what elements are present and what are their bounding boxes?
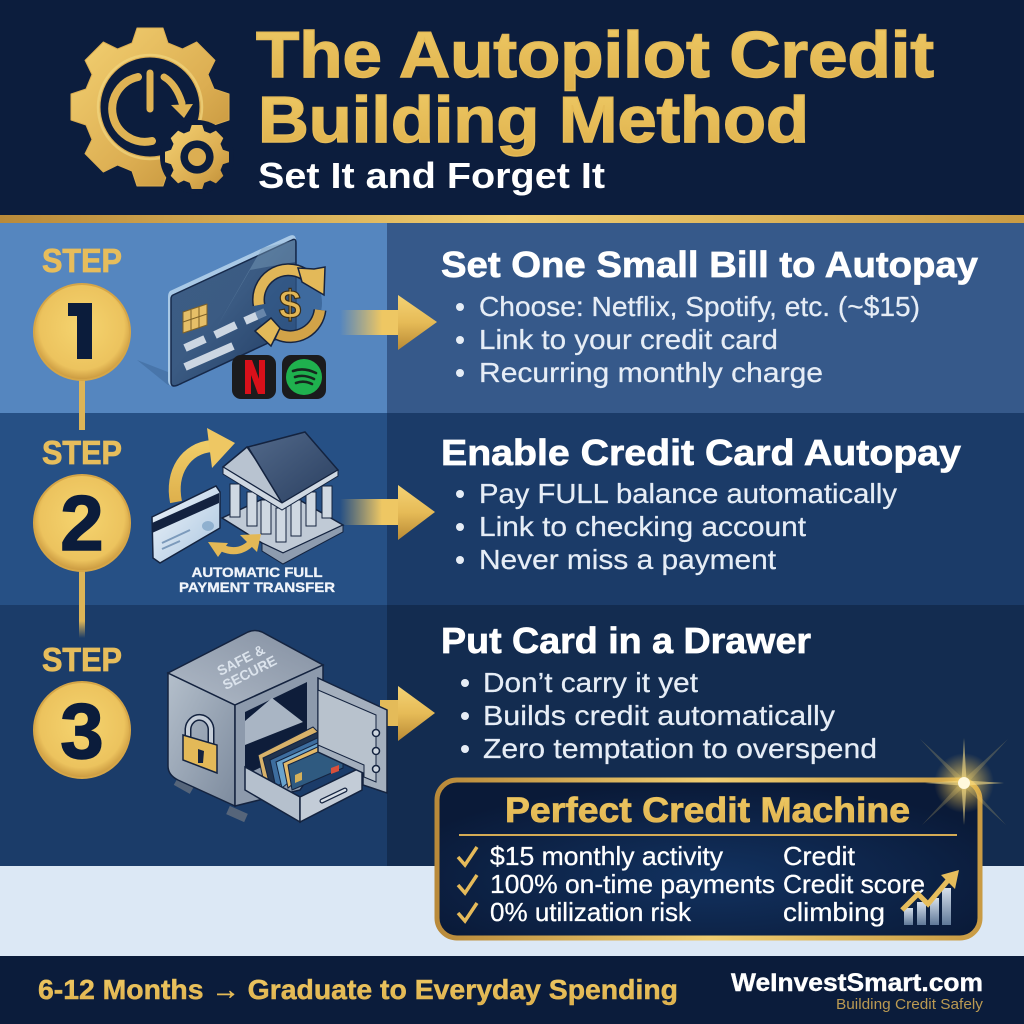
icon: autopilot gear bbox=[71, 28, 234, 194]
checklist: 0% utilization risk bbox=[490, 897, 692, 927]
credit score note bbox=[783, 841, 925, 927]
safe left face bbox=[168, 673, 235, 806]
icon: spotify bbox=[282, 355, 326, 399]
safe top label: SAFE & bbox=[214, 641, 267, 679]
step 3 text: Put Card in a Drawer bbox=[441, 620, 811, 661]
light background band bbox=[0, 866, 1024, 956]
icon: credit card with autopay arrows bbox=[137, 235, 296, 386]
title: The Autopilot Credit bbox=[256, 18, 934, 91]
step 3 text: Builds credit automatically bbox=[483, 700, 835, 731]
arrow: step 2 bbox=[340, 485, 435, 540]
drawer bbox=[245, 767, 362, 822]
step 2 badge: 2 bbox=[60, 479, 104, 567]
icon: recurring dollar arrows bbox=[254, 267, 325, 346]
brand: Building Credit Safely bbox=[836, 996, 983, 1013]
step 2 text: Enable Credit Card Autopay bbox=[441, 432, 961, 473]
panel: perfect credit machine bbox=[437, 780, 980, 938]
step 1 badge bbox=[34, 242, 130, 380]
step 1 text bbox=[441, 244, 978, 388]
step 1 text: Recurring monthly charge bbox=[479, 357, 823, 388]
subtitle: Set It and Forget It bbox=[258, 155, 605, 196]
step 2 text: Pay FULL balance automatically bbox=[479, 478, 897, 509]
arrow: step 1 bbox=[340, 295, 437, 350]
icon: card to bank transfer bbox=[152, 428, 343, 564]
step 1 text: Set One Small Bill to Autopay bbox=[441, 244, 978, 285]
small swap arrows bbox=[208, 534, 261, 557]
step 3 badge bbox=[34, 641, 130, 778]
gold header divider bbox=[0, 215, 1024, 223]
icon: recurring dollar arrows: $ bbox=[279, 283, 301, 327]
header background bbox=[0, 0, 1024, 215]
step 2 badge bbox=[34, 434, 130, 571]
step 2 badge: STEP bbox=[42, 434, 122, 471]
step 3 badge: 3 bbox=[60, 687, 104, 775]
bank building bbox=[222, 432, 343, 564]
arrow: step 3 bbox=[380, 686, 435, 741]
step 3 text bbox=[441, 620, 877, 764]
curved arrow bbox=[175, 428, 235, 502]
icon: rising chart bbox=[902, 870, 959, 925]
step 1 text: Choose: Netflix, Spotify, etc. (~$15) bbox=[479, 291, 920, 322]
panel: step 1 bbox=[0, 223, 1024, 413]
step 2 text: Link to checking account bbox=[479, 511, 806, 542]
transfer caption bbox=[179, 564, 335, 595]
step 2 text: Never miss a payment bbox=[479, 544, 776, 575]
step 3 badge: STEP bbox=[42, 641, 122, 678]
step 1 text: Link to your credit card bbox=[479, 324, 778, 355]
icon: netflix bbox=[232, 355, 276, 399]
safe door bbox=[318, 678, 387, 793]
safe front frame bbox=[235, 665, 323, 806]
sparkle bbox=[920, 738, 1008, 825]
icon: open safe with cards bbox=[168, 630, 387, 822]
step 1 badge: STEP bbox=[42, 242, 122, 279]
credit score note: Credit bbox=[783, 841, 856, 871]
step 3 text: Don’t carry it yet bbox=[483, 667, 698, 698]
credit score note: Credit score bbox=[783, 869, 925, 899]
light credit card bbox=[152, 486, 220, 563]
step 2 text bbox=[441, 432, 961, 575]
checklist: 100% on-time payments bbox=[490, 869, 775, 899]
padlock bbox=[183, 717, 217, 773]
safe feet bbox=[176, 781, 246, 818]
safe top bbox=[168, 630, 323, 705]
footer timeline text: 6-12 Months → Graduate to Everyday Spending bbox=[38, 974, 678, 1005]
card chip bbox=[183, 304, 207, 333]
title: Building Method bbox=[258, 83, 809, 156]
checklist: $15 monthly activity bbox=[490, 841, 723, 871]
stored cards bbox=[258, 727, 343, 790]
footer background bbox=[0, 956, 1024, 1024]
title bbox=[256, 18, 934, 156]
step connector lines bbox=[79, 378, 85, 638]
step 3 text: Zero temptation to overspend bbox=[483, 733, 877, 764]
safe top label: SECURE bbox=[220, 652, 279, 693]
brand: WeInvestSmart.com bbox=[731, 969, 983, 997]
panel: step 2 bbox=[0, 413, 1024, 605]
credit score note: climbing bbox=[783, 897, 885, 927]
safe top label bbox=[213, 639, 279, 693]
transfer caption: AUTOMATIC FULL bbox=[192, 564, 323, 580]
panel title: Perfect Credit Machine bbox=[505, 791, 910, 830]
checklist bbox=[458, 841, 775, 927]
panel: step 3 bbox=[0, 605, 1024, 866]
brand bbox=[731, 969, 983, 1013]
transfer caption: PAYMENT TRANSFER bbox=[179, 579, 335, 595]
